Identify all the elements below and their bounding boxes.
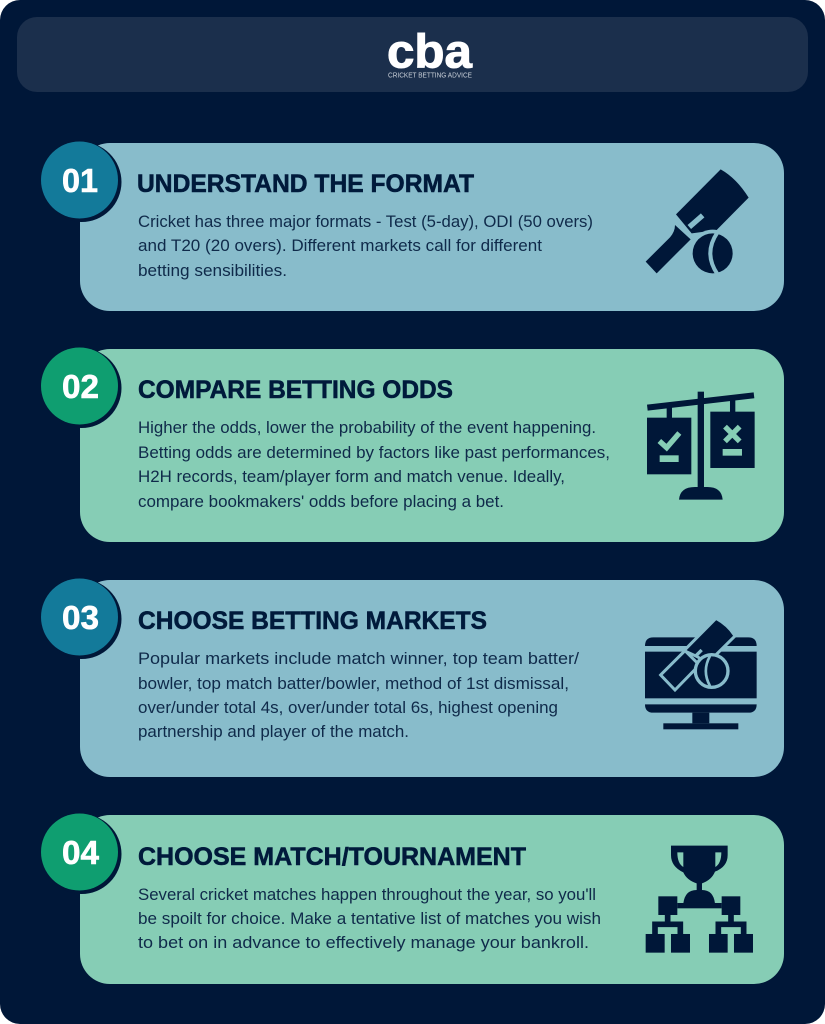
number badge 01: 01 [62,162,98,199]
body text: H2H records, team/player form and match venue. Ideally, [138,468,565,486]
body text [138,419,610,511]
heading: UNDERSTAND THE FORMAT [137,170,474,198]
number badge 01 [41,142,122,222]
number badge 02: 02 [62,368,99,405]
number badge 03: 03 [62,599,99,636]
panel: compare betting odds [41,348,784,542]
body text: bowler, top match batter/bowler, method of 1st dismissal, [138,675,569,693]
icon: trophy and tournament bracket [646,846,753,953]
body text: betting sensibilities. [138,262,287,280]
number badge 04 [41,814,122,894]
heading: COMPARE BETTING ODDS [138,376,453,404]
body text: be spoilt for choice. Make a tentative list of matches you wish [138,910,601,928]
body text: Betting odds are determined by factors like past performances, [138,444,610,462]
panel: choose match or tournament [41,814,784,984]
body text: Popular markets include match winner, top team batter/ [138,650,579,668]
icon: cricket bat and ball [646,169,749,277]
heading: CHOOSE MATCH/TOURNAMENT [138,843,526,871]
number badge 02 [41,348,122,428]
number badge 03 [41,578,122,659]
body text: and T20 (20 overs). Different markets call for different [138,237,542,255]
body text: Cricket has three major formats - Test (5-day), ODI (50 overs) [138,213,593,231]
body text: Several cricket matches happen throughout the year, so you'll [138,886,596,904]
icon: monitor with bat and ball [645,618,757,729]
icon: balance scale with check and cross [647,392,755,500]
body text: to bet on in advance to effectively manage your bankroll. [138,934,589,952]
body text [138,650,579,741]
body text: over/under total 4s, over/under total 6s, highest opening [138,699,558,717]
logo tagline: CRICKET BETTING ADVICE [388,72,472,80]
body text: Higher the odds, lower the probability of the event happening. [138,419,596,437]
panel: understand the format [41,142,784,311]
number badge 04: 04 [62,834,100,871]
body text [138,213,593,280]
body text: compare bookmakers' odds before placing a bet. [138,493,504,511]
panel: choose betting markets [41,578,784,777]
header band [17,17,808,92]
body text [138,886,601,952]
logo wordmark: cba [387,24,473,78]
heading: CHOOSE BETTING MARKETS [138,607,487,635]
body text: partnership and player of the match. [138,723,409,741]
